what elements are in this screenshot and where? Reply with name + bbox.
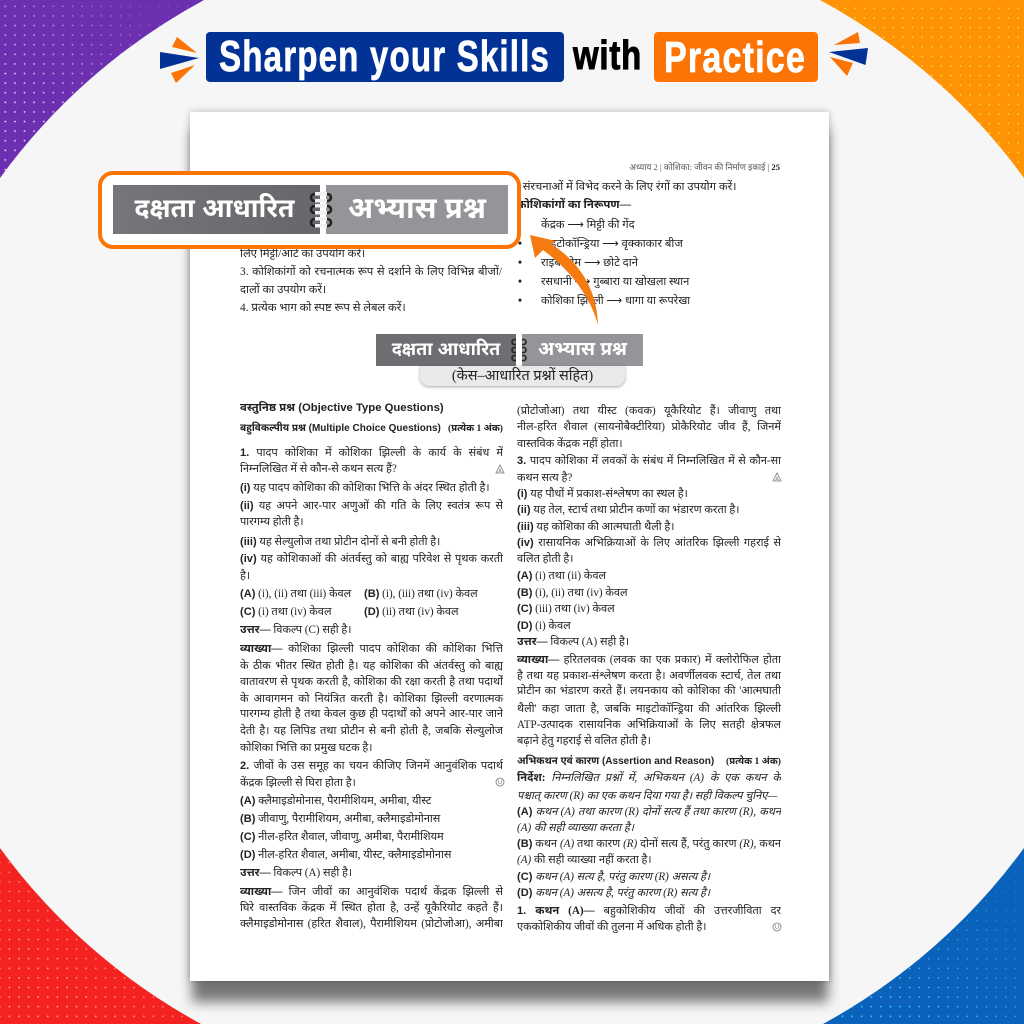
question 1: (i) यह पादप कोशिका की कोशिका भित्ति के अंदर स्थित होती है। [240,482,490,494]
top left text [240,248,502,314]
assertion and reason section: (C) कथन (A) सत्य है, परंतु कारण (R) असत्य है। [517,871,710,883]
icon: right sparks [829,32,868,76]
explanation 1: कोशिका भित्ति का प्रमुख घटक है। [240,742,372,754]
title pills and words: with [572,32,642,78]
assertion and reason section: (B) कथन (A) तथा कारण (R) दोनों सत्य हैं, परंतु कारण (R), कथन [517,838,781,850]
question 3: (iv) रासायनिक अभिक्रियाओं के लिए आंतरिक झिल्ली गहराई से [517,537,781,549]
icon: level marker U (q2): U [498,780,502,786]
explanation 2: घिरे वास्तविक केंद्रक में स्थित होता है, उन्हें यूकैरियोट कहते हैं। [240,902,503,914]
question 3: (B) (i), (ii) तथा (iv) केवल [517,587,628,599]
title banner [160,32,868,83]
icon: left sparks [160,37,199,83]
callout left banner [113,185,320,234]
icon: spiral rings [511,338,527,362]
subtitle pill [420,366,625,386]
top left text: 4. प्रत्येक भाग को स्पष्ट रूप से लेबल करें। [240,302,406,314]
banner left part: दक्षता आधारित [392,339,500,359]
question 1: (iii) यह सेल्युलोज तथा प्रोटीन दोनों से बनी होती है। [240,536,440,548]
question 1: (D) (ii) तथा (iv) केवल [364,606,459,618]
top right text: organelle list: कोशिका झिल्ली ⟶ धागा या रूपरेखा [541,295,690,307]
explanation 3: बढ़ाने हेतु गहराई से वलित होती है। [517,735,651,747]
question 1: है। [240,570,250,582]
callout right banner: अभ्यास प्रश्न [348,192,486,225]
explanation 1: के ठीक भीतर स्थित होती है। यह कोशिका की अंतर्वस्तु को बाह्य [240,660,503,672]
top right text: organelle list: कोशिकांगों का निरूपण— [517,199,631,211]
right column explanation continued [517,404,781,450]
explanation 2: क्लैमाइडोमोनास (हरित शैवाल), पैरामीशियम (प्रोटोजोआ), अमीबा [240,918,503,930]
page header: अध्याय 2 | कोशिका: जीवन की निर्माण इकाई | 25 [629,162,780,172]
banner right part [522,334,643,366]
top right text: organelle list: केंद्रक ⟶ मिट्टी की गेंद [541,219,635,231]
icon: level marker U (q2) [496,778,504,786]
question 1: (C) (i) तथा (iv) केवल [240,606,331,618]
top right text: organelle list: . संरचनाओं में विभेद करने के लिए रंगों का उपयोग करें। [517,181,737,193]
top left text: 3. कोशिकांगों को रचनात्मक रूप से दर्शाने के लिए विभिन्न बीजों/ [240,266,502,278]
icon: level marker A (q1) [495,464,505,474]
left column heading: (प्रत्येक 1 अंक) [448,423,503,434]
assertion and reason section: (प्रत्येक 1 अंक) [726,756,781,767]
top right text: organelle list: • [518,238,522,250]
question 1: (A) (i), (ii) तथा (iii) केवल [240,588,351,600]
explanation 3: है तथा यह प्रकाश-संश्लेषण करता है। अवर्णीलवक स्टार्च, तेल तथा [517,670,781,682]
question 3: (iii) यह कोशिका की आत्मघाती थैली है। [517,521,674,533]
explanation 3: थैली' कहा जाता है, जबकि माइटोकॉन्ड्रिया की आंतरिक झिल्ली [517,703,781,715]
top right text: organelle list: राइबोसोम ⟶ छोटे दाने [541,257,638,269]
question 3: (ii) यह तेल, स्टार्च तथा प्रोटीन कणों का भंडारण करता है। [517,504,739,516]
assertion and reason section: अभिकथन एवं कारण (Assertion and Reason) [517,756,714,767]
callout: enlarged banner [98,171,521,249]
subtitle pill: (केस–आधारित प्रश्नों सहित) [452,368,593,384]
question 1: (B) (i), (iii) तथा (iv) केवल [364,588,478,600]
question 2: (D) नील-हरित शैवाल, अमीबा, यीस्ट, क्लैमाइडोमोनास [240,849,451,861]
explanation 3 [517,653,781,748]
callout left banner: दक्षता आधारित [135,193,294,223]
question 2: (C) नील-हरित शैवाल, जीवाणु, अमीबा, पैरामीशियम [240,831,444,843]
explanation 1: वातावरण से पृथक करती है, कोशिका की रक्षा करती है तथा पदार्थों [240,676,503,688]
question 3: वलित होती है। [517,553,574,565]
page shadow [192,130,828,1002]
explanation 1: पारगम्य होती है तथा केवल कुछ ही पदार्थों को अपने आर-पार जाने [240,708,503,720]
question 2: केंद्रक झिल्ली से घिरा होता है। [240,777,356,789]
icon: level marker A (q3) [772,472,782,482]
banner left part [376,334,516,366]
question 3: (C) (iii) तथा (iv) केवल [517,603,615,615]
arrow [530,235,598,325]
question 2: (A) क्लैमाइडोमोनास, पैरामीशियम, अमीबा, यीस्ट [240,795,431,807]
top left text: दालों का उपयोग करें। [240,284,326,296]
icon: level marker U (assertion 1) [772,922,782,932]
explanation 2: व्याख्या— जिन जीवों का आनुवंशिक पदार्थ केंद्रक झिल्ली से [240,886,503,898]
explanation 1: के आवागमन को नियंत्रित करती है। कोशिका झिल्ली वरणात्मक [240,693,503,705]
assertion and reason section: (A) कथन (A) तथा कारण (R) दोनों सत्य हैं तथा कारण (R), कथन [517,806,781,818]
title pills and words: Sharpen your Skills [219,32,550,81]
explanation 1 [240,642,503,754]
top left text: लिए मिट्टी/आटे का उपयोग करें। [240,248,365,260]
assertion and reason section: (A) की सही व्याख्या करता है। [517,822,634,834]
explanation 2 [240,884,503,930]
assertion 1: एककोशिकीय जीवों की तुलना में अधिक होती है। [517,921,707,933]
right column explanation continued: (प्रोटोजोआ) तथा यीस्ट (कवक) यूकैरियोट हैं। जीवाणु तथा [517,405,781,417]
right column explanation continued: वास्तविक केंद्रक नहीं होता। [517,438,623,450]
center banner [376,334,643,389]
question 2: 2. जीवों के उस समूह का चयन कीजिए जिनमें आनुवंशिक पदार्थ [240,760,503,772]
question 3 [517,454,781,648]
icon: level marker U (assertion 1): U [775,925,779,931]
question 3: उत्तर— विकल्प (A) सही है। [517,636,629,648]
right column explanation continued: नील-हरित शैवाल (सायनोबैक्टीरिया) प्रोकैरियोट जीव हैं, जिनमें [517,421,781,433]
assertion 1: 1. कथन (A)— बहुकोशिकीय जीवों की उत्तरजीविता दर [517,905,781,917]
question 1: 1. पादप कोशिका में कोशिका झिल्ली के कार्य के संबंध में [240,447,503,459]
question 1: निम्नलिखित में से कौन-से कथन सत्य हैं? [240,463,397,475]
left column heading: वस्तुनिष्ठ प्रश्न (Objective Type Questions) [240,402,444,414]
question 2: (B) जीवाणु, पैरामीशियम, अमीबा, क्लैमाइडोमोनास [240,813,440,825]
assertion and reason section: (D) कथन (A) असत्य है, परंतु कारण (R) सत्य है। [517,887,710,899]
top right text: organelle list: • [518,257,522,269]
question 1: (ii) यह अपने आर-पार अणुओं की गति के लिए स्वतंत्र रूप से [240,500,503,512]
banner right part: अभ्यास प्रश्न [538,339,627,360]
left column heading: बहुविकल्पीय प्रश्न (Multiple Choice Questions) [240,423,441,434]
explanation 1: देती है। यह लिपिड तथा प्रोटीन से बनी होती है, जबकि सेल्युलोज [240,725,503,737]
explanation 3: ATP-उत्पादक रासायनिक अभिक्रियाओं के लिए सतही क्षेत्रफल [517,719,781,731]
left column heading [240,401,503,434]
top right text: organelle list [517,180,737,307]
top right text: organelle list: • [518,276,522,288]
question 3: कथन सत्य है? [517,472,572,484]
question 3: (A) (i) तथा (ii) केवल [517,570,606,582]
assertion and reason section: (A) की सही व्याख्या नहीं करता है। [517,854,652,866]
question 1: उत्तर— विकल्प (C) सही है। [240,624,352,636]
question 3: (D) (i) केवल [517,620,571,632]
question 1 [240,446,503,636]
explanation 3: प्रोटीन का भंडारण करते हैं। लयनकाय को कोशिका की 'आत्मघाती [517,685,781,697]
callout right banner [326,185,508,234]
question 1: (iv) यह कोशिकाओं की अंतर्वस्तु को बाह्य परिवेश से पृथक करती [240,553,503,565]
book page [190,112,829,981]
assertion and reason section: निर्देश: निम्नलिखित प्रश्नों में, अभिकथन (A) के एक कथन के [517,772,781,784]
top right text: organelle list: रसधानी ⟶ गुब्बारा या खोखला स्थान [541,276,689,288]
assertion and reason section [517,754,781,899]
question 2: उत्तर— विकल्प (A) सही है। [240,867,352,879]
top right text: organelle list: • [518,295,522,307]
assertion and reason section: पश्चात् कारण (R) का एक कथन दिया गया है। सही विकल्प चुनिए— [517,790,777,802]
title pills and words: Practice [664,33,806,82]
top right text: organelle list: माइटोकॉन्ड्रिया ⟶ वृक्काकार बीज [541,238,683,250]
explanation 3: व्याख्या— हरितलवक (लवक का एक प्रकार) में क्लोरोफिल होता [517,654,781,666]
question 2 [240,758,503,879]
assertion 1 [517,904,781,934]
icon: callout spiral rings [310,192,332,228]
explanation 1: व्याख्या— कोशिका झिल्ली पादप कोशिका की कोशिका भित्ति [240,643,503,655]
question 1: पारगम्य होती है। [240,516,304,528]
question 3: 3. पादप कोशिका में लवकों के संबंध में निम्नलिखित में से कौन-सा [517,455,781,467]
question 3: (i) यह पौधों में प्रकाश-संश्लेषण का स्थल है। [517,488,688,500]
